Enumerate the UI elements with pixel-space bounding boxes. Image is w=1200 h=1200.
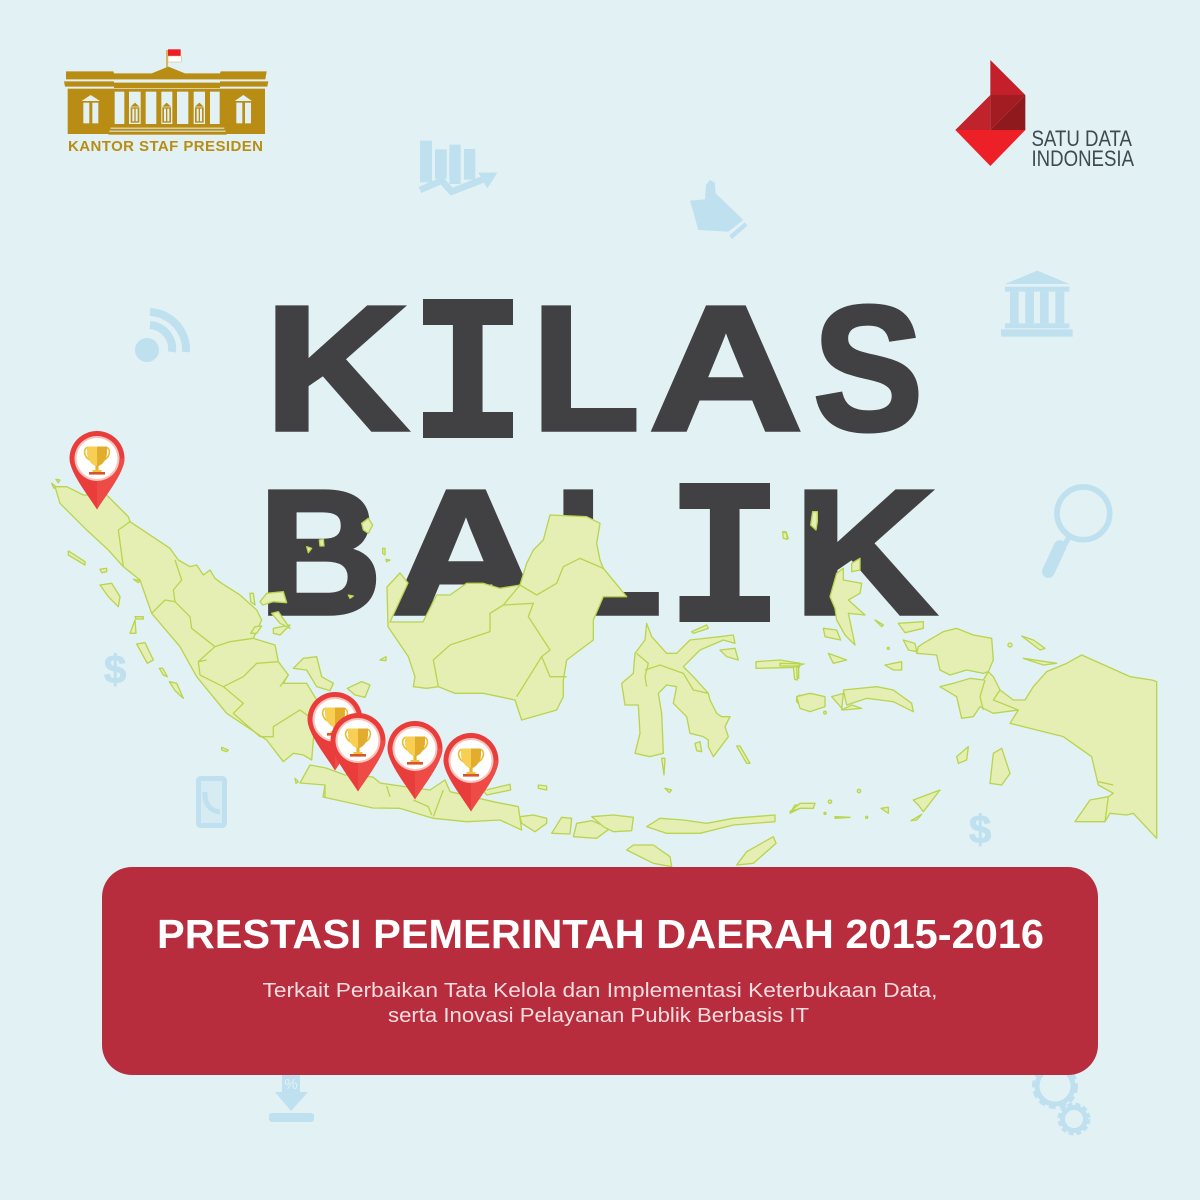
icon: download percent [269, 1070, 314, 1122]
icon: download percent: % [284, 1076, 298, 1093]
building [64, 49, 268, 135]
title: KILAS BALIK: A [649, 269, 803, 468]
logo mark [955, 60, 1025, 166]
icon: dollar right: $ [969, 808, 991, 852]
map pins with trophies [70, 431, 498, 812]
icon: dollar left: $ [104, 648, 126, 692]
title: KILAS BALIK: K [793, 453, 936, 652]
logo wordmark: KANTOR STAF PRESIDEN [68, 138, 263, 155]
icon: wifi signal [135, 312, 186, 362]
banner heading: PRESTASI PEMERINTAH DAERAH 2015-2016 [157, 911, 1044, 957]
pin: Aceh [70, 431, 124, 510]
logo wordmark: INDONESIA [1032, 146, 1134, 171]
icon: government building [1001, 271, 1073, 337]
title: KILAS BALIK: L [532, 269, 640, 468]
logo wordmark: SATU DATA [1032, 126, 1132, 151]
title: KILAS BALIK: K [264, 269, 408, 468]
icon: gears [1034, 1064, 1089, 1134]
logo: Satu Data Indonesia [955, 60, 1134, 171]
map: Java, Kalimantan, Sulawesi, Nusa Tenggara [300, 515, 800, 867]
icon: magnifying glass [1048, 487, 1110, 572]
title: KILAS BALIK: S [813, 269, 923, 468]
pin: East Java [444, 733, 498, 812]
background icons [104, 141, 1110, 1134]
title: KILAS BALIK: I [443, 269, 492, 468]
pin: Jakarta [308, 692, 362, 770]
panel: title banner [102, 867, 1098, 1075]
pin: West Java [330, 713, 386, 792]
logo: Kantor Staf Presiden [64, 49, 268, 155]
icon: phone [198, 778, 224, 826]
banner subtitle: Terkait Perbaikan Tata Kelola dan Implementasi Keterbukaan Data, [262, 979, 938, 1002]
logo wordmark [1032, 126, 1134, 171]
icon: bar chart with arrow [420, 141, 497, 192]
map: Sumatra and western islands [52, 479, 390, 783]
map: Maluku and Papua [780, 512, 1157, 838]
icon: thumbs up [690, 180, 746, 237]
map of Indonesia [52, 479, 1157, 867]
title: KILAS BALIK: L [554, 453, 662, 652]
banner subtitle: serta Inovasi Pelayanan Publik Berbasis IT [388, 1004, 810, 1027]
title: KILAS BALIK [259, 269, 936, 652]
banner subtitle [262, 979, 938, 1027]
title: KILAS BALIK: A [389, 453, 543, 652]
pin: Central Java [388, 721, 442, 800]
title: KILAS BALIK: B [259, 453, 382, 652]
title: KILAS BALIK: I [700, 453, 749, 652]
